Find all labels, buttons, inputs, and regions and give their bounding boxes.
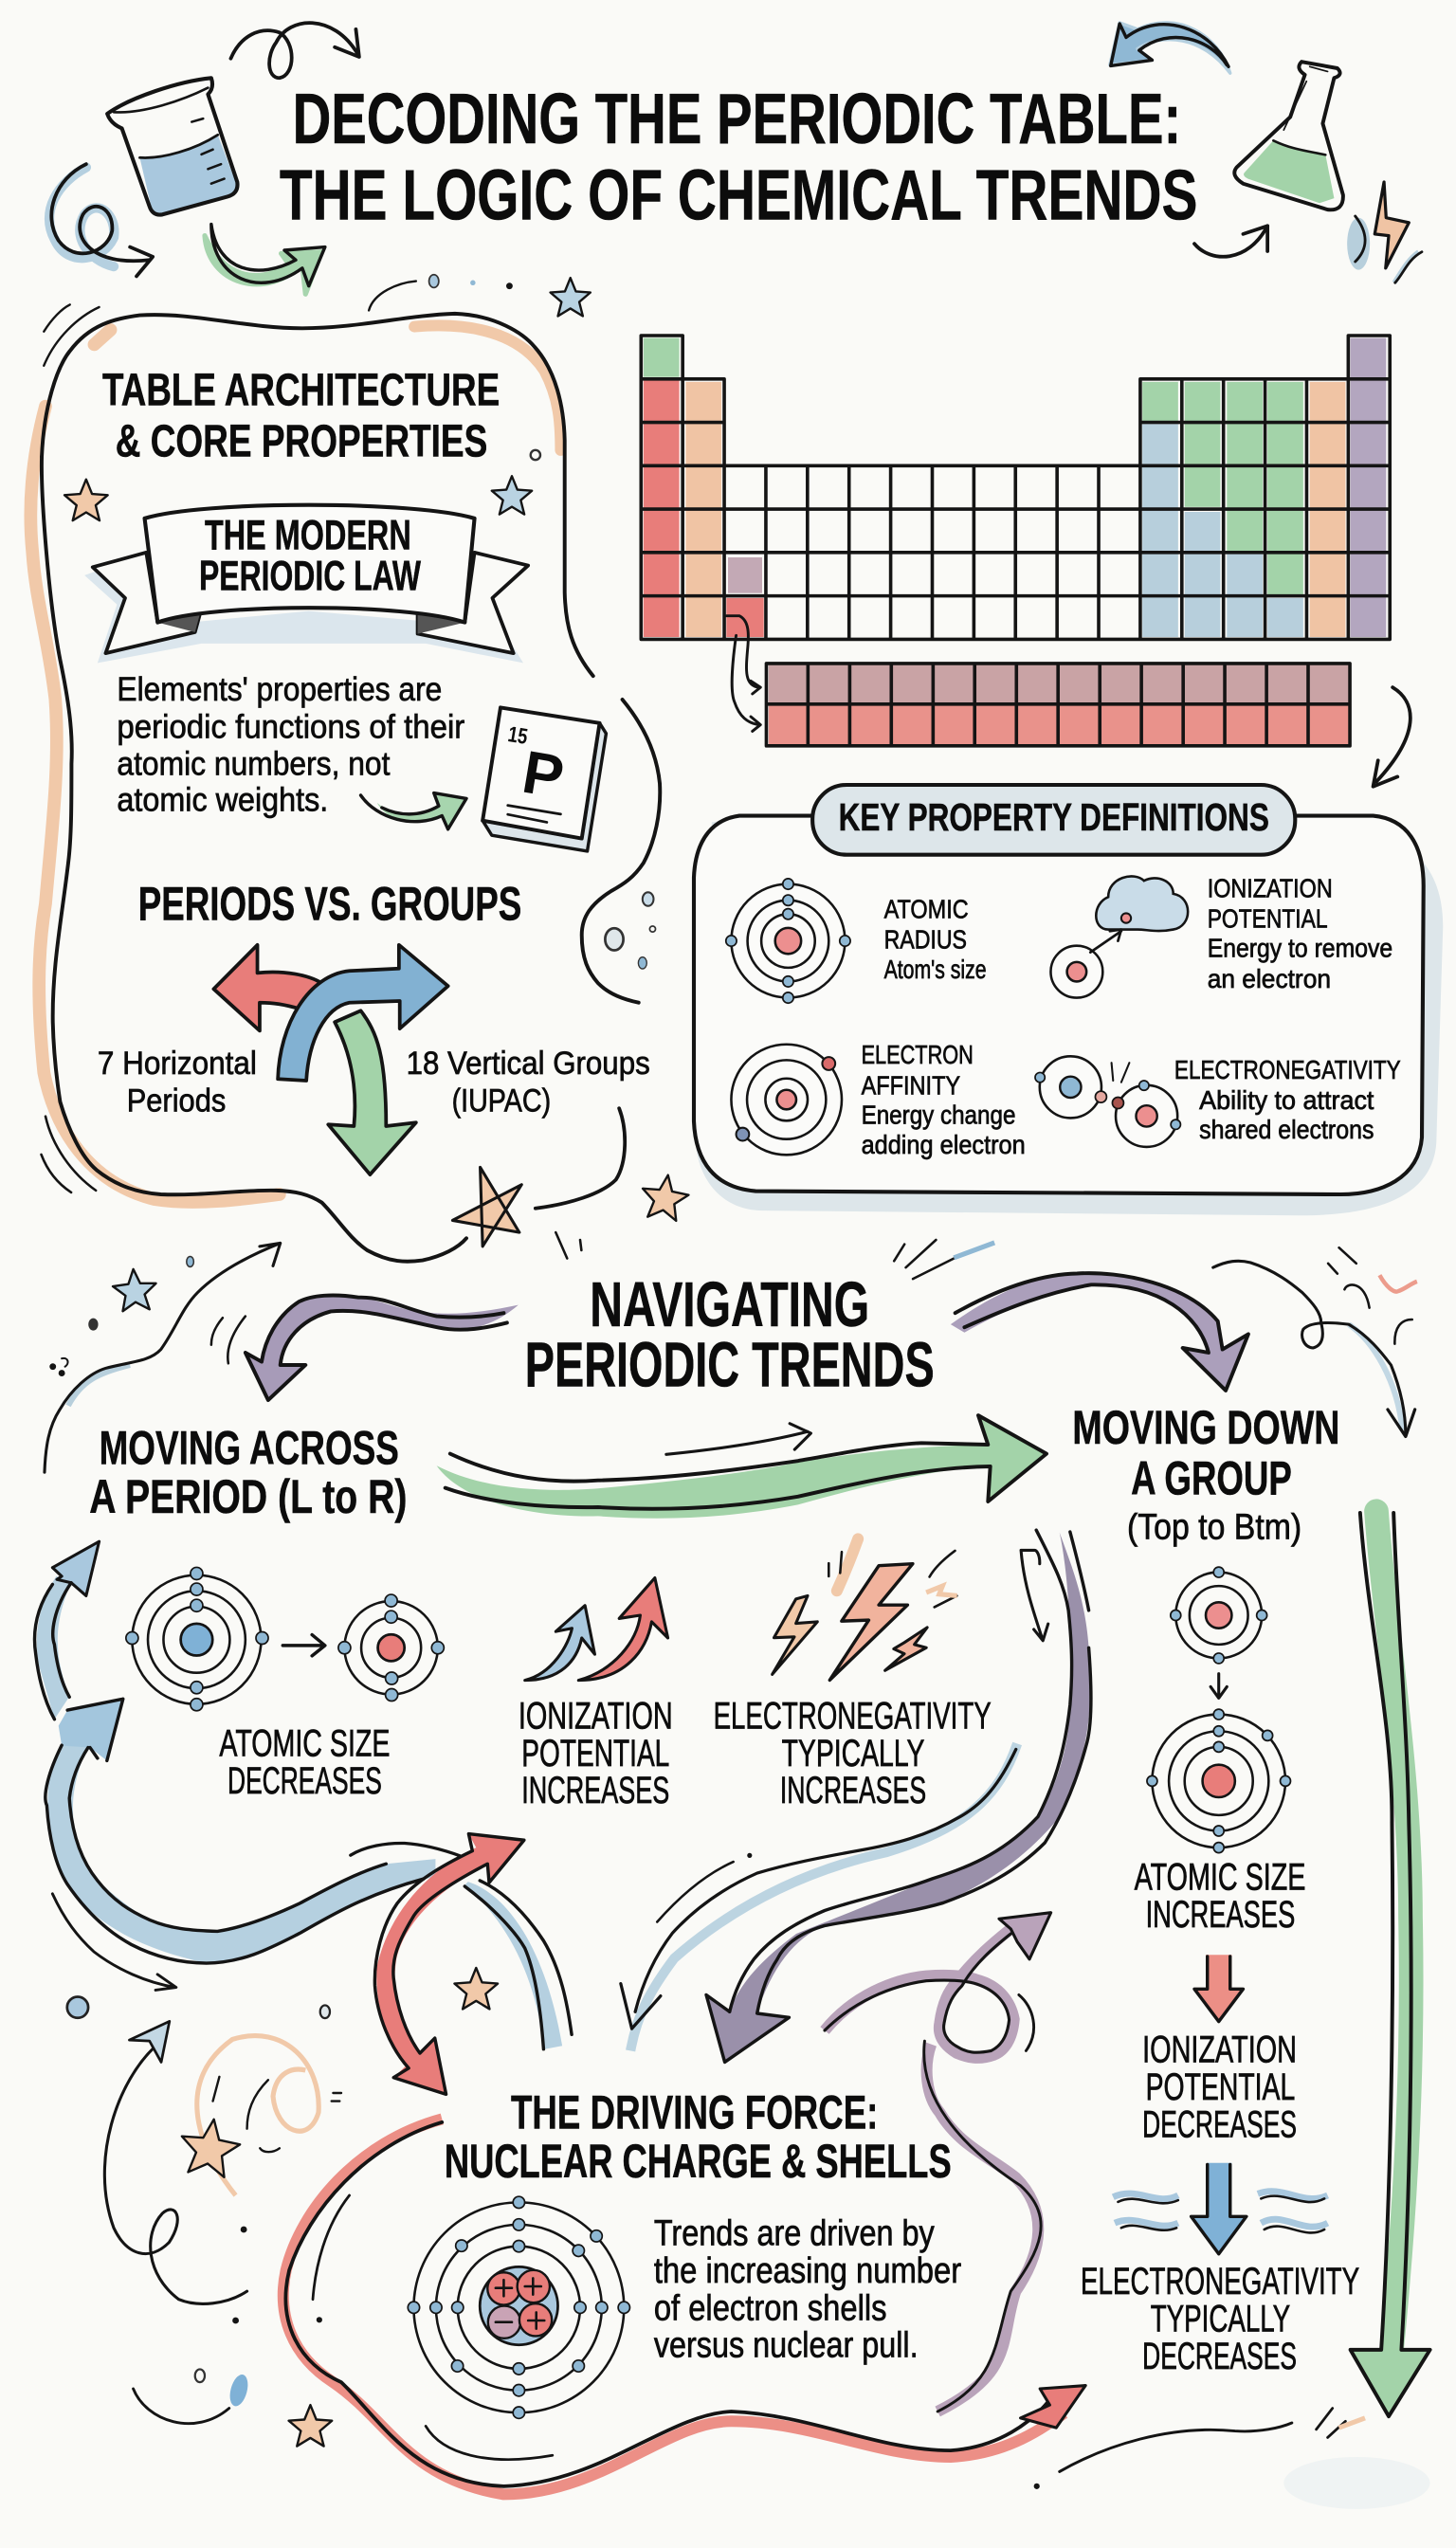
text: ionization potential decreases <box>1142 2029 1297 2145</box>
text: electronegativity decreases <box>1081 2261 1359 2377</box>
ionization potential: POTENTIAL <box>1208 903 1328 933</box>
arrow: spiral <box>49 164 153 276</box>
text: trends explanation <box>654 2212 961 2365</box>
arrows: table to f-block <box>726 616 760 731</box>
heading: the driving force: NUCLEAR CHARGE & SHELLS <box>445 2135 952 2188</box>
text: ionization potential decreases: POTENTIAL <box>1146 2066 1295 2108</box>
heading: navigating periodic trends: PERIODIC TRENDS <box>525 1329 935 1400</box>
icon: atom nucleus and shells <box>408 2196 629 2418</box>
ionization potential <box>1050 873 1392 998</box>
icon: atom <box>726 879 850 1003</box>
atomic radius: Atom's size <box>884 955 987 984</box>
arrow: green to P tile <box>361 793 466 829</box>
panel: key property definitions <box>694 785 1443 1215</box>
heading: moving across a period <box>89 1422 407 1523</box>
text: atomic size increases: ATOMIC SIZE <box>1135 1857 1305 1899</box>
icon: beaker <box>107 78 238 215</box>
atomic radius: ATOMIC <box>884 895 969 924</box>
text: atomic size decreases: ATOMIC SIZE <box>219 1723 390 1765</box>
electron affinity: ELECTRON <box>862 1040 974 1069</box>
title: DECODING THE PERIODIC TABLE: <box>293 79 1181 158</box>
electron affinity: Energy change <box>862 1100 1015 1129</box>
text: electronegativity increases: TYPICALLY <box>782 1733 924 1774</box>
text: electronegativity increases: ELECTRONEGATIVITY <box>714 1695 992 1737</box>
heading pill <box>812 785 1295 855</box>
heading: table architecture <box>102 366 500 467</box>
text: periodic law definition: periodic functions of their <box>117 708 465 745</box>
text: electronegativity decreases: TYPICALLY <box>1151 2298 1290 2339</box>
heading: moving down a group: MOVING DOWN <box>1072 1401 1339 1454</box>
heading: the driving force <box>445 2086 952 2188</box>
icon: lightning bolts <box>773 1538 957 1680</box>
arrow: purple to group <box>951 1273 1248 1391</box>
arrow: green down right side <box>1351 1511 1430 2416</box>
text: periodic law definition: atomic weights. <box>117 781 328 818</box>
title <box>280 79 1197 234</box>
arrow: purple looping <box>825 1913 1051 2412</box>
electron affinity: AFFINITY <box>862 1071 960 1101</box>
ionization potential: an electron <box>1208 964 1331 993</box>
banner: the modern periodic law: PERIODIC LAW <box>199 553 422 599</box>
heading: table architecture: & CORE PROPERTIES <box>116 417 487 467</box>
banner: the modern periodic law: THE MODERN <box>205 512 411 558</box>
arrow: thin top right <box>1213 1261 1415 1436</box>
panel outline: driving force <box>283 2119 1085 2494</box>
electron affinity <box>731 1040 1026 1159</box>
icon: lightning top right <box>1347 182 1422 282</box>
arrow: red left <box>213 945 321 1030</box>
star blue small <box>492 476 532 515</box>
text: trends explanation: versus nuclear pull. <box>654 2325 919 2365</box>
dots and scribbles lower left <box>67 1997 330 2424</box>
text: ionization potential increases: INCREASES <box>521 1770 669 1811</box>
f-block table <box>766 664 1350 746</box>
star blue left <box>112 1267 157 1312</box>
text: trends explanation: the increasing number <box>654 2250 961 2290</box>
electronegativity: ELECTRONEGATIVITY <box>1174 1055 1401 1084</box>
arrow: small black below flask <box>1194 226 1267 257</box>
scribbles around heading <box>555 1232 1417 1344</box>
arrow: purple to period <box>246 1295 519 1400</box>
text: electronegativity decreases: DECREASES <box>1142 2336 1297 2377</box>
text: electronegativity increases <box>714 1695 992 1811</box>
electronegativity: Ability to attract <box>1199 1085 1374 1115</box>
ionization potential: Energy to remove <box>1208 934 1392 963</box>
star peach <box>64 480 108 520</box>
atomic radius <box>726 879 987 1003</box>
icon: phosphorus tile: 15 <box>506 721 530 749</box>
icon: flask <box>1234 62 1343 209</box>
icon: atom with incoming electron <box>731 1045 842 1155</box>
atoms: size increases down group <box>1147 1567 1290 1853</box>
icon: phosphorus tile <box>482 707 606 851</box>
arrow shaft: upper blue <box>37 1576 71 1720</box>
arrow: small black over green <box>666 1424 810 1454</box>
arrow: black loop top left <box>230 23 359 78</box>
text: periodic law definition <box>117 671 465 818</box>
arrow: thin to star <box>45 1243 281 1472</box>
arrow: green under beaker <box>205 225 325 294</box>
heading: moving down a group <box>1072 1401 1339 1546</box>
heading: periods vs groups: PERIODS VS. GROUPS <box>138 877 521 930</box>
arrow: to key definitions <box>1374 687 1410 787</box>
heading: navigating periodic trends: NAVIGATING <box>590 1269 869 1340</box>
electron affinity: adding electron <box>862 1130 1026 1159</box>
text: trends explanation: of electron shells <box>654 2287 886 2327</box>
arrow: thin loop left lower <box>104 2021 247 2303</box>
label: horizontal periods: 7 Horizontal <box>98 1046 257 1082</box>
star peach right <box>639 1172 691 1222</box>
atomic radius: RADIUS <box>884 924 967 954</box>
banner: the modern periodic law <box>84 505 528 663</box>
text: trends explanation: Trends are driven by <box>654 2212 935 2252</box>
arrow: blue right <box>278 945 448 1081</box>
heading: table architecture: TABLE ARCHITECTURE <box>102 366 500 416</box>
label: vertical groups <box>407 1046 650 1119</box>
arrow: blue loop left <box>35 1541 572 2049</box>
text: electronegativity increases: INCREASES <box>780 1770 926 1811</box>
heading: moving down a group: (Top to Btm) <box>1127 1506 1301 1546</box>
arrow: green down <box>328 1010 416 1174</box>
text: atomic size increases: INCREASES <box>1146 1894 1295 1936</box>
star peach bottom <box>289 2405 332 2447</box>
text: atomic size decreases <box>219 1723 390 1802</box>
label: horizontal periods <box>98 1046 257 1119</box>
arrow: red double headed <box>374 1834 524 2094</box>
label: vertical groups: (IUPAC) <box>452 1083 551 1119</box>
icon: crossing arrows <box>213 945 448 1174</box>
electronegativity: shared electrons <box>1199 1115 1374 1144</box>
arrow: blue down with waves <box>1113 2163 1328 2254</box>
peach spiral and star <box>177 2036 341 2195</box>
arrow shaft: blue arch <box>464 1882 562 2049</box>
text: atomic size increases <box>1135 1857 1305 1936</box>
arrow: purple to core <box>706 1530 1091 2062</box>
arrow: green across period <box>437 1415 1046 1519</box>
heading: moving down a group: A GROUP <box>1131 1452 1292 1505</box>
icon: phosphorus tile: P <box>518 739 569 811</box>
text: ionization potential increases: IONIZATION <box>519 1695 673 1737</box>
heading: moving across a period: A PERIOD (L to R) <box>89 1470 407 1523</box>
star blue <box>551 278 591 316</box>
heading pill: KEY PROPERTY DEFINITIONS <box>839 795 1269 839</box>
text: ionization potential decreases: IONIZATION <box>1142 2029 1297 2070</box>
heading: the driving force: THE DRIVING FORCE: <box>511 2086 878 2139</box>
icon: atom with electron cloud <box>1050 876 1188 998</box>
text: ionization potential decreases: DECREASES <box>1142 2103 1297 2145</box>
star peach center <box>454 1968 498 2009</box>
star large peach <box>452 1167 521 1247</box>
text: periodic law definition: Elements' properties are <box>117 671 442 708</box>
heading: moving across a period: MOVING ACROSS <box>100 1422 399 1475</box>
arrow: red down <box>1194 1955 1243 2022</box>
label: vertical groups: 18 Vertical Groups <box>407 1046 650 1082</box>
periodic table <box>641 336 1390 639</box>
specks above panel <box>44 275 513 366</box>
text: ionization potential increases: POTENTIAL <box>521 1733 669 1774</box>
icon: bonded atoms <box>1035 1056 1180 1147</box>
electronegativity <box>1035 1055 1401 1147</box>
arrow: blue thin to core <box>621 1743 1017 2050</box>
atoms: size decreases across period <box>126 1567 444 1711</box>
panel: table architecture <box>30 314 660 1262</box>
label: horizontal periods: Periods <box>127 1083 226 1119</box>
scribble bottom right <box>1034 2409 1430 2509</box>
text: periodic law definition: atomic numbers, not <box>117 746 391 783</box>
heading: navigating periodic trends <box>525 1269 935 1400</box>
text: ionization potential increases <box>519 1695 673 1811</box>
icon: rising arrows <box>525 1578 668 1681</box>
ionization potential: IONIZATION <box>1208 873 1333 902</box>
text: atomic size decreases: DECREASES <box>228 1760 382 1802</box>
arrow shaft: lower blue <box>47 1745 435 1963</box>
arrow: thin black to right of blue <box>52 1894 176 1990</box>
arrow: blue above flask <box>1110 23 1230 73</box>
